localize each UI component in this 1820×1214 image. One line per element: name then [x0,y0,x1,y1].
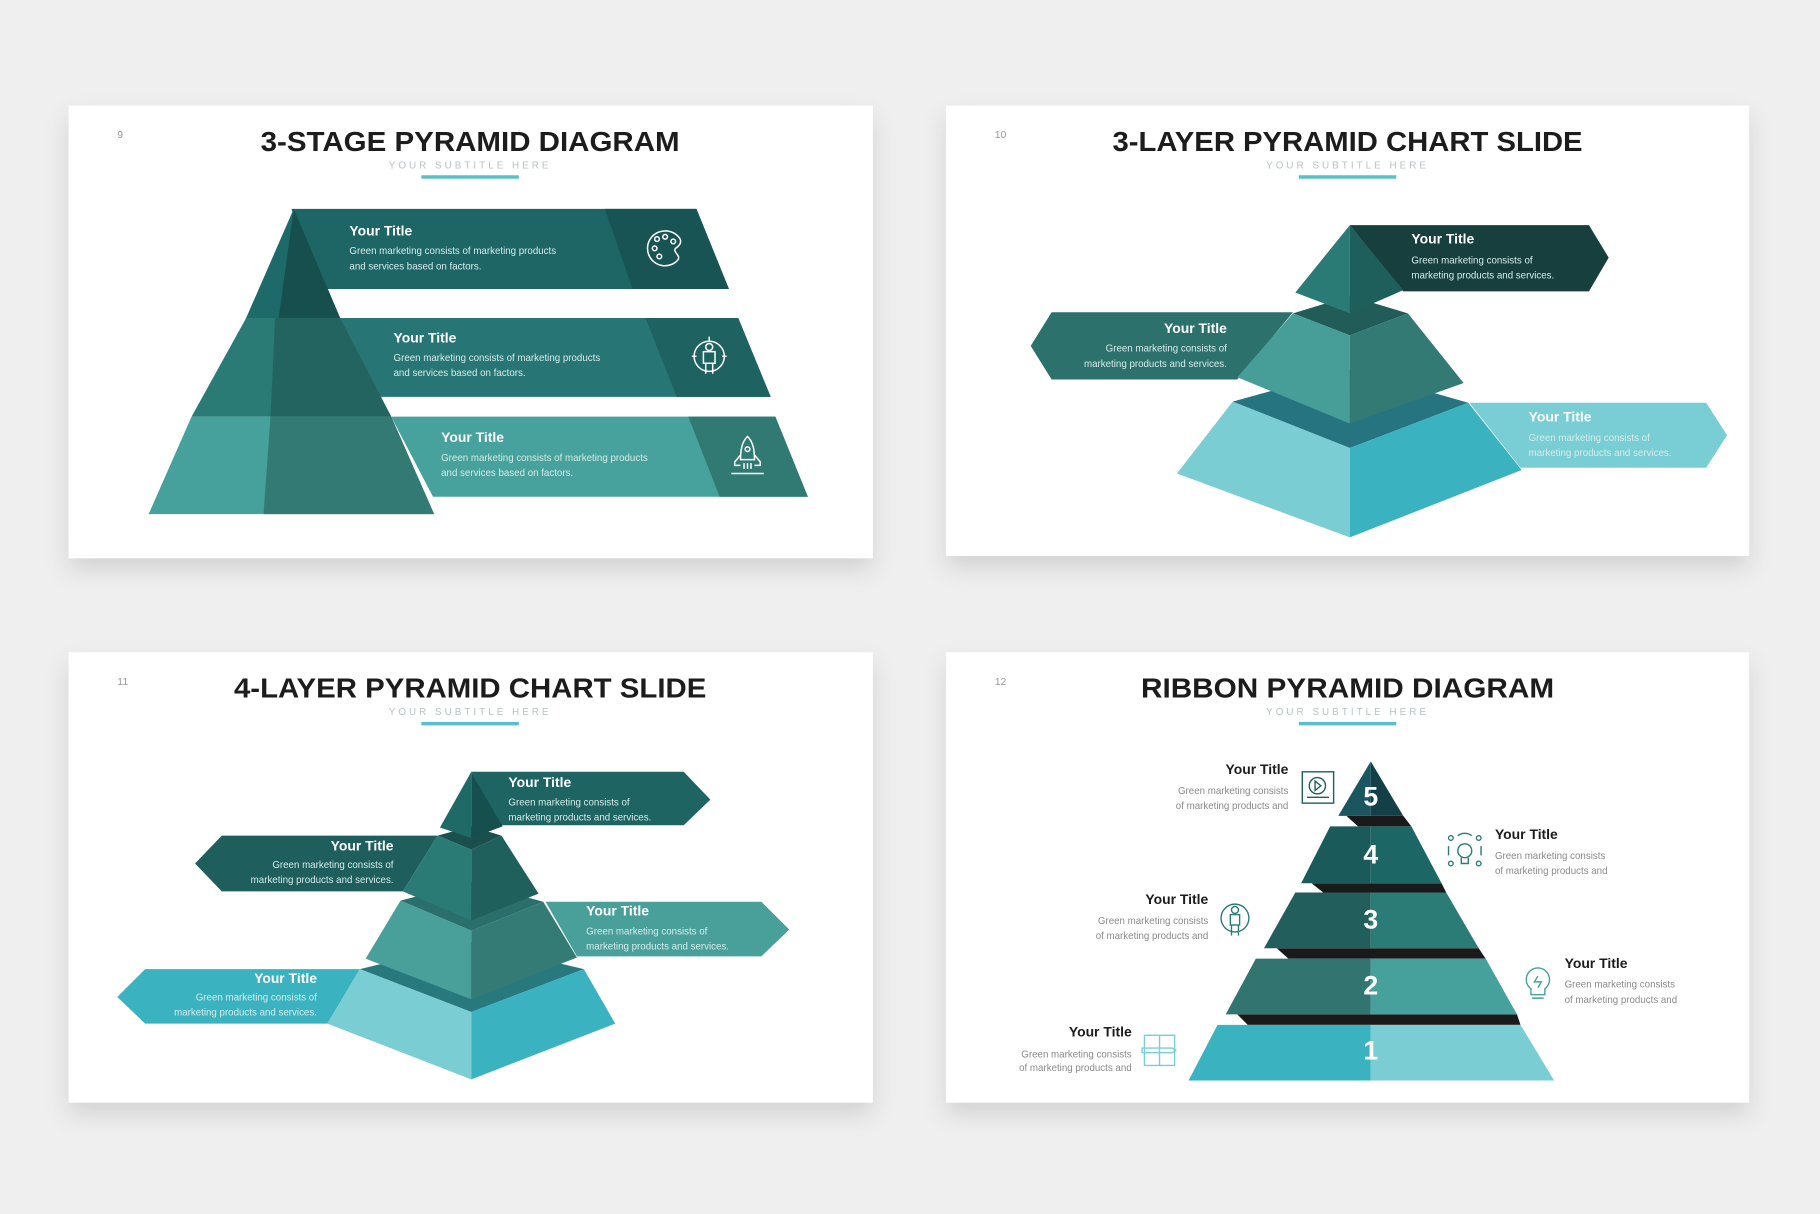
band: top: Your Title [349,223,413,239]
text block: tier 4 [1495,826,1608,877]
pyramid: 3 stages [149,209,434,514]
icon: light bulb [1526,968,1549,998]
text block: tier 5: Your Title [1226,761,1289,777]
page number 9: 9 [117,130,123,141]
icon: target person [1221,904,1249,935]
text block: tier 2: Your Title [1565,955,1628,971]
icon: target person [692,337,727,374]
band: bottom [391,417,808,497]
panel: 3-layer pyramid chart slide [946,106,1749,556]
text block: tier 5 [1176,761,1289,812]
banner: layer 4 left [117,969,360,1024]
page number 10: 10 [995,130,1007,141]
icon: rocket [731,436,764,474]
banner: bottom right: Green marketing consists of [1529,433,1650,444]
heading [261,126,680,179]
text block: tier 2: Green marketing consists [1565,980,1675,991]
text block: tier 2 [1565,955,1677,1006]
pyramid: 3 layers [1177,225,1522,537]
banner: bottom right: marketing products and services. [1529,448,1671,459]
banner: layer 2 left [195,836,438,891]
icon: palette [648,231,681,266]
banner: top: Green marketing consists of [1411,255,1533,266]
banner: bottom right [1469,403,1727,468]
banner: layer 1 top: Green marketing consists of [508,797,630,808]
icon: book and pencil [1142,1035,1176,1065]
text block: tier 3: Green marketing consists [1098,916,1208,927]
banner: middle left: marketing products and services. [1084,359,1227,370]
heading [1141,673,1554,725]
heading: RIBBON PYRAMID DIAGRAM [1141,673,1554,704]
banner: layer 4 left: Your Title [254,970,317,986]
icon: video player [1302,772,1334,803]
text block: tier 3 [1096,891,1209,942]
banner: layer 3 right: Your Title [586,903,649,919]
band: bottom: and services based on factors. [441,468,573,479]
heading: YOUR SUBTITLE HERE [389,707,552,718]
text block: tier 1: Your Title [1069,1023,1132,1039]
band: top: Green marketing consists of marketing products [349,246,556,257]
page number 12: 12 [995,677,1007,688]
pyramid: ribbon tiers: 1 [1363,1036,1378,1066]
pyramid: ribbon tiers: 2 [1363,971,1378,1001]
banner: layer 3 right: Green marketing consists of [586,926,708,937]
text block: tier 5: Green marketing consists [1178,786,1288,797]
band: middle: Green marketing consists of marketing products [394,353,600,364]
text block: tier 5: of marketing products and [1176,801,1288,812]
pyramid: ribbon tiers: 3 [1363,904,1378,934]
banner: layer 4 left: marketing products and services. [174,1008,317,1019]
heading: YOUR SUBTITLE HERE [1266,160,1429,171]
banner: middle left: Your Title [1164,320,1227,336]
banner: layer 2 left: Your Title [331,838,394,854]
band: top [291,209,729,289]
pyramid: ribbon tiers: 5 [1363,781,1378,811]
pyramid: 4 layers [327,772,615,1079]
banner: bottom right: Your Title [1529,408,1592,424]
banner: top [1350,225,1609,291]
banner: layer 3 right [546,902,789,956]
icon: team idea [1449,833,1481,866]
band: top: and services based on factors. [349,261,481,272]
text block: tier 3: Your Title [1145,891,1209,907]
panel: 3-stage pyramid diagram [69,106,873,558]
band: bottom: Your Title [441,429,504,445]
text block: tier 4: Your Title [1495,826,1558,842]
text block: tier 1: Green marketing consists [1021,1049,1132,1060]
banner: top: marketing products and services. [1411,271,1554,282]
pyramid: ribbon tiers [1189,761,1554,1081]
banner: layer 3 right: marketing products and services. [586,941,729,952]
heading [1113,126,1583,179]
banner: layer 1 top: marketing products and services. [508,813,651,824]
heading [234,673,706,725]
text block: tier 4: of marketing products and [1495,866,1608,877]
heading: 3-STAGE PYRAMID DIAGRAM [261,126,680,157]
band: middle [340,318,771,397]
page number 11: 11 [117,677,128,688]
banner: layer 1 top [471,772,710,825]
text block: tier 1 [1019,1023,1132,1074]
band: middle: and services based on factors. [394,368,526,379]
banner: layer 4 left: Green marketing consists of [196,992,317,1003]
pyramid: ribbon tiers: 4 [1363,839,1378,869]
banner: layer 2 left: Green marketing consists of [272,860,394,871]
heading: YOUR SUBTITLE HERE [389,160,552,171]
panel: 4-layer pyramid chart slide [69,652,873,1103]
banner: middle left [1031,312,1293,380]
text block: tier 4: Green marketing consists [1495,851,1605,862]
text block: tier 2: of marketing products and [1565,995,1677,1006]
heading: YOUR SUBTITLE HERE [1266,707,1429,718]
panel: ribbon pyramid diagram [946,652,1749,1103]
heading: 3-LAYER PYRAMID CHART SLIDE [1113,126,1583,157]
heading: 4-LAYER PYRAMID CHART SLIDE [234,673,706,704]
banner: layer 1 top: Your Title [508,774,572,790]
band: bottom: Green marketing consists of marketing products [441,453,648,464]
banner: layer 2 left: marketing products and services. [251,875,394,886]
banner: top: Your Title [1411,231,1474,247]
banner: middle left: Green marketing consists of [1106,344,1227,355]
band: middle: Your Title [394,329,457,345]
text block: tier 3: of marketing products and [1096,931,1208,942]
text block: tier 1: of marketing products and [1019,1063,1132,1074]
